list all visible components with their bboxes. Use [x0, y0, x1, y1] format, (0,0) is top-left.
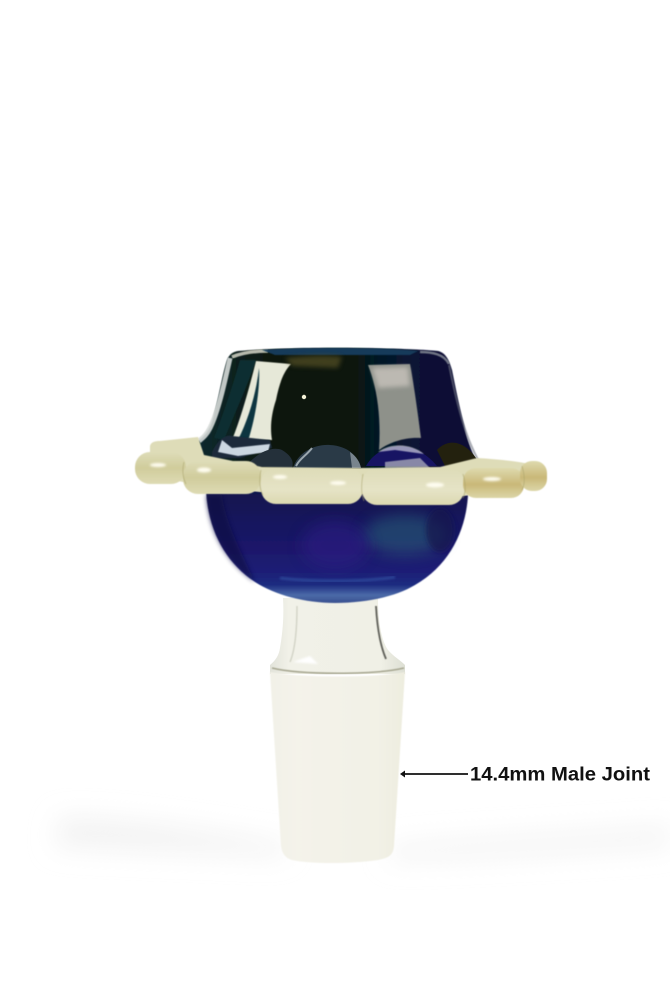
scallop 2 — [183, 461, 261, 494]
left edge highlight — [199, 358, 230, 441]
lower bowl — [206, 490, 468, 603]
left reflection — [232, 361, 291, 440]
shoulder bump centre — [293, 445, 361, 468]
left reflections near base — [212, 436, 272, 458]
upper bowl — [196, 348, 480, 470]
product: glass bowl — [135, 348, 547, 863]
bowl neck — [270, 598, 405, 674]
dark stripe left — [214, 360, 256, 440]
callout: 14.4mm Male Joint — [400, 764, 651, 786]
scallop 4 — [362, 468, 464, 505]
glints — [150, 463, 501, 488]
scallop 6 — [520, 461, 547, 491]
scallop seams — [183, 462, 524, 501]
shoulder bump left — [246, 449, 293, 468]
scallop 3 — [261, 468, 363, 504]
rim highlight — [232, 351, 268, 357]
cream scalloped ring — [135, 437, 547, 505]
frosted male joint — [270, 672, 405, 863]
shoulder bump right — [366, 445, 437, 468]
floor shadow — [55, 818, 670, 860]
label text: 14.4mm Male Joint — [470, 764, 651, 786]
shoulder bump far right — [437, 443, 478, 466]
gold sheen at top — [285, 356, 342, 368]
right reflection — [368, 364, 421, 450]
scallop 1 — [135, 452, 186, 484]
ring back plate — [150, 437, 530, 496]
arrow — [400, 770, 468, 778]
scallop 5 — [463, 468, 524, 498]
